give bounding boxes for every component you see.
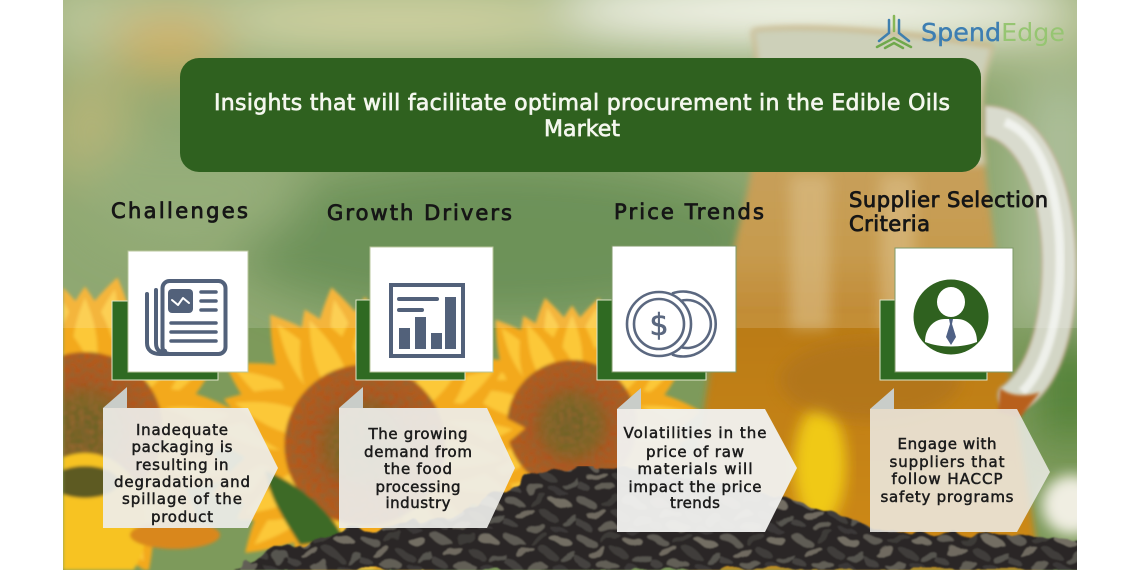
icon: newspaper: [147, 281, 226, 354]
callout: Volatilities in the: [624, 424, 766, 442]
column: Price Trends: [597, 200, 797, 532]
icon card: [112, 251, 248, 380]
callout: packaging is: [132, 438, 233, 456]
callout: impact the price: [628, 478, 762, 496]
icon: logo mark: [877, 16, 911, 48]
heading: Price Trends: [614, 200, 764, 224]
callout: suppliers that: [890, 453, 1005, 471]
heading: Challenges: [111, 199, 248, 223]
pile of sunflower seeds: [225, 466, 1080, 570]
callout tab: [870, 388, 894, 409]
faded upper band: [63, 0, 1077, 328]
heading: Growth Drivers: [327, 201, 512, 225]
oil jug: [690, 27, 1076, 570]
title text: [214, 91, 950, 142]
callout: Engage with: [898, 435, 996, 453]
callout tab: [103, 387, 127, 408]
callout: [339, 408, 515, 528]
callout: The growing: [368, 425, 468, 443]
heading: Supplier Selection: [849, 188, 1048, 212]
title text: Insights that will facilitate optimal procurement in the Edible Oils: [214, 91, 950, 116]
callout: spillage of the: [122, 490, 242, 508]
column: Challenges: [103, 199, 278, 528]
callout: materials will: [638, 460, 752, 478]
icon: supplier person: [914, 280, 988, 354]
callout: degradation and: [114, 473, 250, 491]
heading: [849, 188, 1048, 236]
heading: Criteria: [849, 212, 930, 236]
callout: the food: [384, 460, 452, 478]
callout tab: [339, 387, 363, 408]
callout: price of raw: [646, 443, 744, 461]
icon card: [880, 248, 1013, 380]
callout: trends: [670, 494, 720, 512]
sunflowers: [63, 0, 723, 570]
icon card: [356, 247, 493, 380]
title text: Market: [544, 117, 620, 142]
icon: coins: $: [649, 308, 669, 343]
icon card: [597, 246, 736, 380]
callout: follow HACCP: [892, 470, 1002, 488]
callout: safety programs: [880, 488, 1014, 506]
callout: processing: [376, 478, 460, 496]
callout: product: [151, 508, 213, 526]
callout: Inadequate: [136, 421, 228, 439]
callout: [617, 409, 797, 532]
callout: industry: [386, 494, 451, 512]
callout: demand from: [364, 443, 472, 461]
logo: [877, 16, 1065, 48]
column: Supplier Selection Criteria: [849, 188, 1050, 532]
callout: [870, 409, 1050, 532]
title banner: [180, 58, 981, 172]
icon: bar chart report: [391, 285, 463, 356]
callout: [103, 408, 278, 528]
callout: resulting in: [136, 456, 228, 474]
column: Growth Drivers: [327, 201, 515, 528]
logo wordmark: SpendEdge: [921, 18, 1065, 47]
callout tab: [617, 388, 641, 409]
